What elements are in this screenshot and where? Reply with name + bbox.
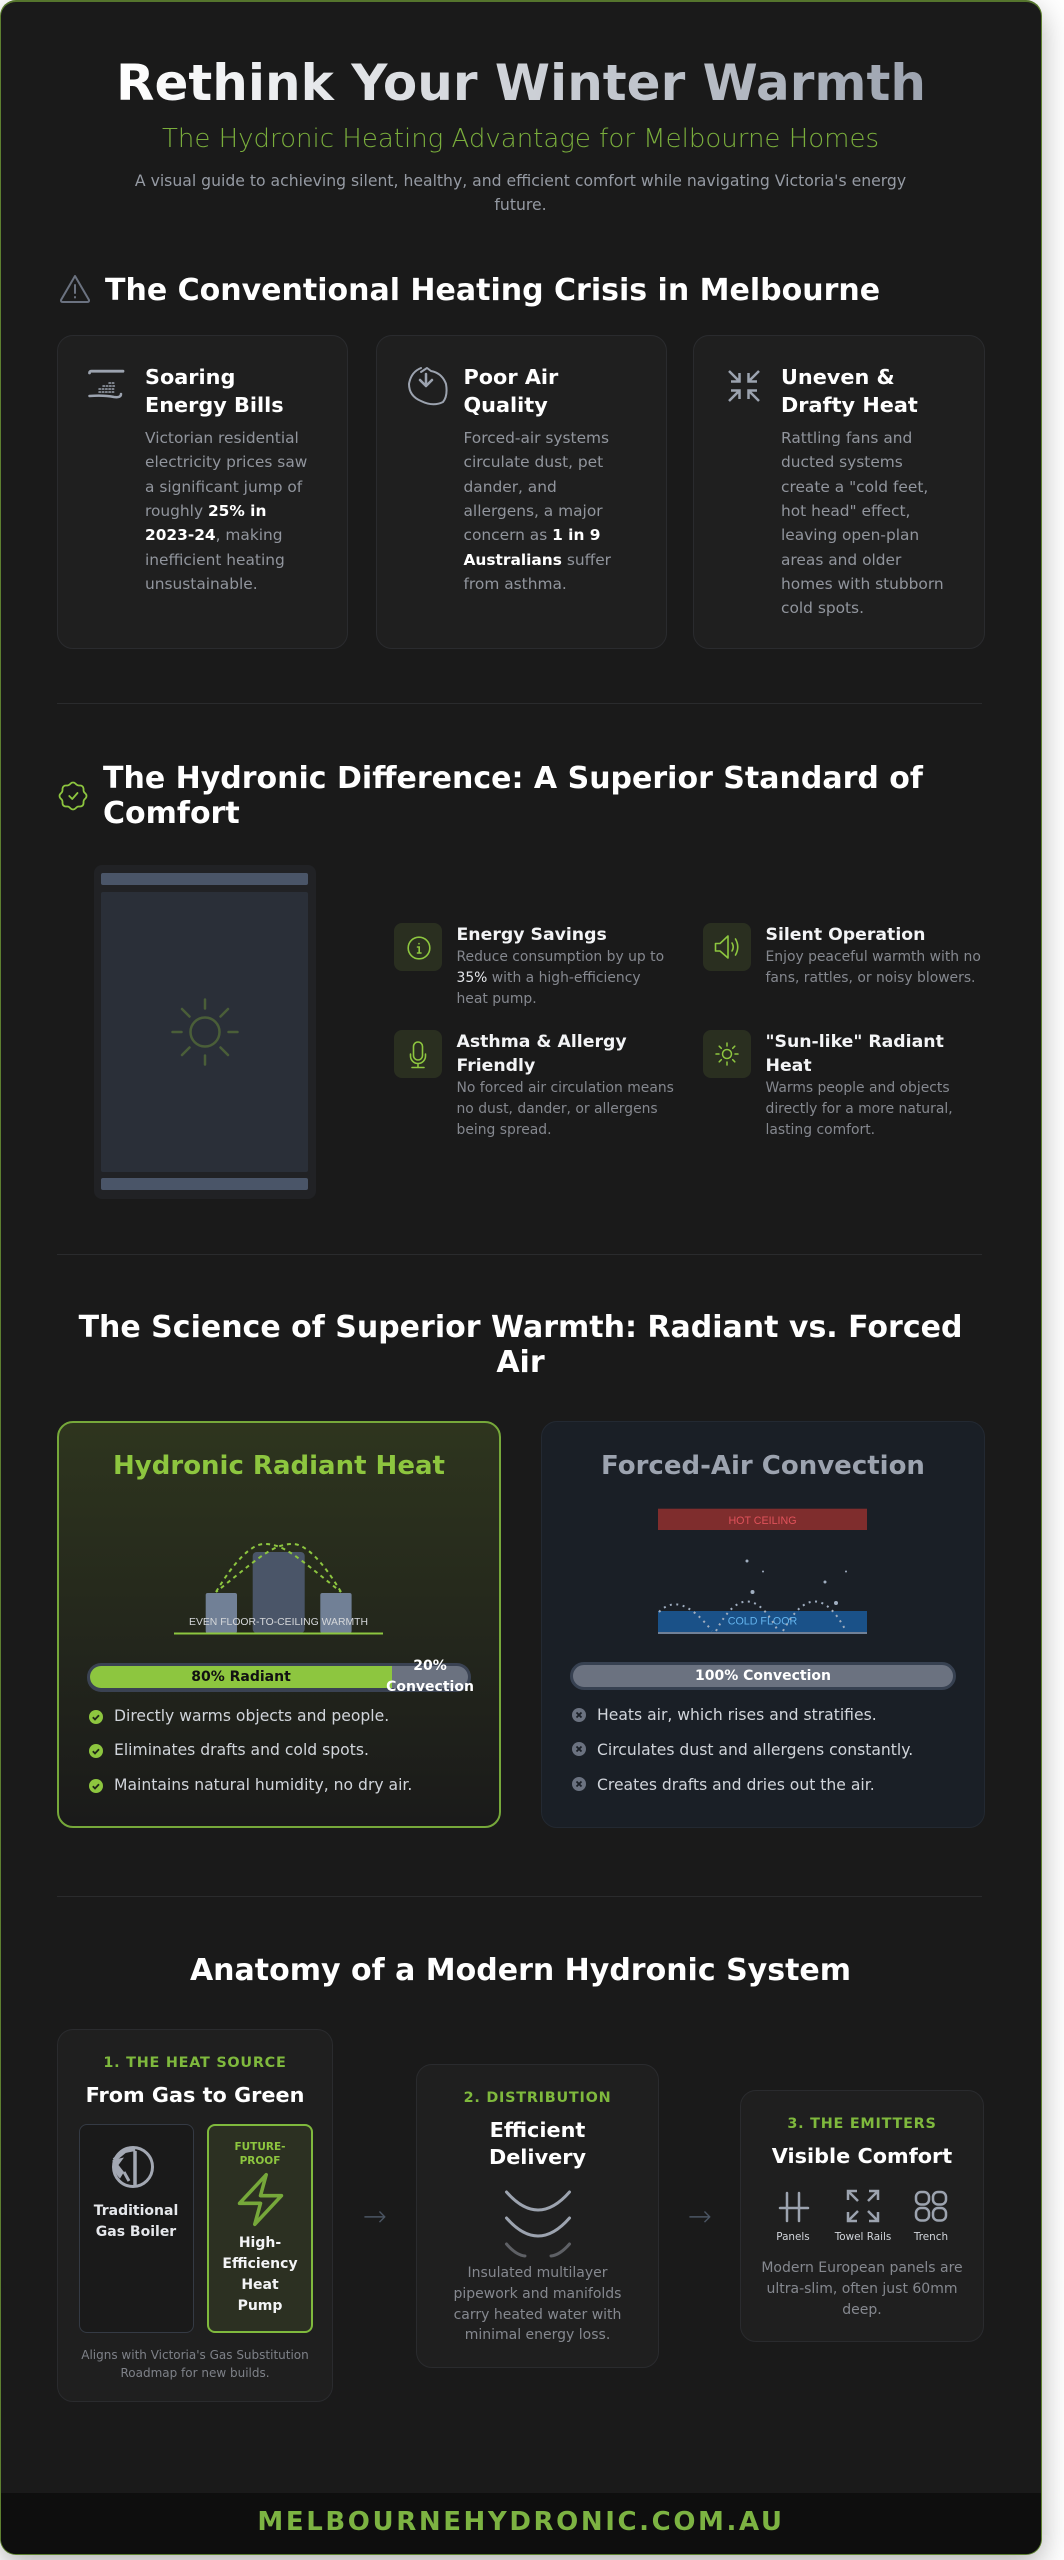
intro text: future. xyxy=(494,195,547,214)
icon: sun xyxy=(171,998,239,1066)
body text: a significant jump of xyxy=(145,478,302,496)
body text xyxy=(781,429,944,617)
step label: 1. THE HEAT SOURCE xyxy=(103,2055,287,2071)
text: no dust, dander, or allergens xyxy=(456,1101,658,1117)
body text xyxy=(741,2258,983,2320)
body text: dander, and xyxy=(464,478,557,496)
panel: hydronic radiant heat xyxy=(57,1421,501,1828)
body text xyxy=(145,429,307,593)
body text: Rattling fans and xyxy=(781,429,912,447)
heading: Efficient xyxy=(490,2118,585,2142)
body text: Modern European panels are xyxy=(761,2260,963,2276)
body text: roughly 25% in xyxy=(145,502,266,520)
text: heat pump. xyxy=(456,991,537,1007)
heading: hydronic difference: Comfort xyxy=(103,796,240,830)
title xyxy=(456,1032,627,1076)
text: No forced air circulation means xyxy=(456,1080,674,1096)
item xyxy=(572,1777,586,1791)
item text: Circulates dust and allergens constantly. xyxy=(597,1741,913,1759)
diagram: stratified air: HOT CEILING xyxy=(728,1515,797,1527)
label radiant: 80% Radiant xyxy=(191,1669,291,1685)
body text: pipework and manifolds xyxy=(454,2286,621,2302)
heading: Delivery xyxy=(489,2145,586,2169)
body text: hot head" effect, xyxy=(781,502,910,520)
panel: distribution xyxy=(416,2064,659,2368)
body text: areas and older xyxy=(781,551,901,569)
bar: 100 convection xyxy=(570,1662,956,1690)
text: 35% with a high-efficiency xyxy=(456,970,641,986)
feature: sun-like radiant heat xyxy=(703,1030,953,1138)
label: Traditional xyxy=(94,2203,178,2219)
icon: speaker xyxy=(703,923,751,971)
icon: energy bills xyxy=(88,370,124,398)
label convection: Convection xyxy=(386,1679,474,1695)
body text: allergens, a major xyxy=(464,502,603,520)
title: Friendly xyxy=(456,1056,535,1076)
label xyxy=(94,2203,178,2240)
bar: 80 radiant 20 convection xyxy=(87,1663,471,1692)
body text: concern as 1 in 9 xyxy=(464,526,600,544)
heading xyxy=(145,365,284,417)
label: trench: Trench xyxy=(914,2231,948,2243)
heading: Hydronic Radiant Heat xyxy=(113,1451,445,1481)
icon: towel rails xyxy=(846,2189,880,2223)
text xyxy=(766,1080,953,1138)
label: towel rails: Towel Rails xyxy=(835,2231,891,2243)
label: High- xyxy=(239,2235,281,2251)
item xyxy=(89,1710,103,1724)
title xyxy=(766,1032,944,1076)
panel: uneven and drafty heat xyxy=(693,335,985,649)
text: fans, rattles, or noisy blowers. xyxy=(766,970,975,986)
item text: Maintains natural humidity, no dry air. xyxy=(114,1776,412,1794)
heading: crisis: The Conventional Heating Crisis in Melbourne xyxy=(105,272,880,308)
heading: Uneven & xyxy=(781,365,895,389)
label xyxy=(222,2235,298,2314)
body text: inefficient heating xyxy=(145,551,285,569)
top bar xyxy=(101,873,308,885)
body text: Insulated multilayer xyxy=(468,2265,607,2281)
icon: trench xyxy=(914,2190,948,2224)
subtitle: The Hydronic Heating Advantage for Melbourne Homes xyxy=(162,124,879,154)
icon: warning triangle xyxy=(60,275,90,303)
feature: asthma and allergy friendly xyxy=(394,1030,674,1138)
label: Gas Boiler xyxy=(96,2224,176,2240)
icon: pipes xyxy=(505,2190,571,2258)
label: Heat xyxy=(241,2277,279,2293)
icon: info xyxy=(394,923,442,971)
panel: heat source xyxy=(57,2029,333,2402)
note: Aligns with Victoria's Gas Substitution xyxy=(81,2348,309,2362)
note xyxy=(81,2348,309,2380)
body text: from asthma. xyxy=(464,575,567,593)
body text: Forced-air systems xyxy=(464,429,609,447)
heading: Poor Air xyxy=(464,365,558,389)
tag: PROOF xyxy=(240,2155,280,2167)
title: Rethink Your Winter Warmth xyxy=(116,54,926,112)
title: Asthma & Allergy xyxy=(456,1032,627,1052)
fill radiant xyxy=(90,1666,392,1688)
step label: 3. THE EMITTERS xyxy=(787,2116,937,2132)
item text: Directly warms objects and people. xyxy=(114,1707,389,1725)
body text: Victorian residential xyxy=(145,429,299,447)
text: Warms people and objects xyxy=(766,1080,950,1096)
label: 100% Convection xyxy=(695,1668,831,1684)
text: being spread. xyxy=(456,1122,552,1138)
text xyxy=(766,949,981,986)
icon: panels xyxy=(779,2191,809,2223)
title: "Sun-like" Radiant xyxy=(766,1032,944,1052)
diagram: radiant heat room: EVEN FLOOR-TO-CEILING WARMTH xyxy=(189,1617,368,1628)
body text: circulate dust, pet xyxy=(464,453,603,471)
text: Reduce consumption by up to xyxy=(456,949,664,965)
tag xyxy=(234,2141,286,2167)
heading: Drafty Heat xyxy=(781,393,918,417)
heading xyxy=(781,365,918,417)
label: panels: Panels xyxy=(776,2231,810,2243)
text: directly for a more natural, xyxy=(766,1101,953,1117)
body text: ducted systems xyxy=(781,453,903,471)
option: heat pump xyxy=(207,2124,313,2333)
label: Efficiency xyxy=(222,2256,298,2272)
diagram: stratified air: COLD FLOOR xyxy=(728,1616,798,1628)
icon: gas boiler xyxy=(112,2146,154,2188)
item text: Creates drafts and dries out the air. xyxy=(597,1776,875,1794)
body text: 2023-24, making xyxy=(145,526,283,544)
body text: deep. xyxy=(842,2302,882,2318)
heading: anatomy: Anatomy of a Modern Hydronic System xyxy=(190,1952,851,1988)
footer url: MELBOURNEHYDRONIC.COM.AU xyxy=(257,2507,785,2537)
arrow: → xyxy=(688,2199,712,2233)
icon: sun small xyxy=(703,1030,751,1078)
body text: leaving open-plan xyxy=(781,526,919,544)
body text: cold spots. xyxy=(781,599,864,617)
intro text xyxy=(135,171,906,214)
icon: check badge xyxy=(58,782,88,810)
heading: Forced-Air Convection xyxy=(601,1451,925,1481)
icon: microphone xyxy=(394,1030,442,1078)
text xyxy=(456,949,664,1007)
radiator illustration xyxy=(94,865,316,1199)
item xyxy=(89,1779,103,1793)
feature: energy savings xyxy=(394,923,664,1007)
icon: arrows inward xyxy=(728,370,760,402)
heading: Quality xyxy=(464,393,548,417)
heading xyxy=(464,365,558,417)
text xyxy=(456,1080,674,1138)
icon: air quality xyxy=(408,367,448,406)
fill convection xyxy=(392,1666,468,1688)
panel body xyxy=(101,892,308,1172)
body text: create a "cold feet, xyxy=(781,478,928,496)
label convection: 20% xyxy=(413,1658,447,1674)
heading: From Gas to Green xyxy=(86,2083,304,2107)
heading: Visible Comfort xyxy=(772,2144,952,2168)
item xyxy=(572,1742,586,1756)
step label: 2. DISTRIBUTION xyxy=(464,2090,611,2106)
body text: unsustainable. xyxy=(145,575,258,593)
heading xyxy=(417,2117,658,2171)
title: Energy Savings xyxy=(456,925,607,945)
icon: lightning xyxy=(238,2172,284,2226)
panel: poor air quality xyxy=(376,335,666,649)
text: Enjoy peaceful warmth with no xyxy=(766,949,981,965)
title: Heat xyxy=(766,1056,812,1076)
option: gas boiler xyxy=(79,2124,194,2333)
heading: Soaring xyxy=(145,365,235,389)
intro text: A visual guide to achieving silent, healthy, and efficient comfort while navigating Victoria's energy xyxy=(135,171,906,190)
body text xyxy=(464,429,611,593)
item text: Eliminates drafts and cold spots. xyxy=(114,1741,369,1759)
feature: silent operation xyxy=(703,923,981,986)
arrow: → xyxy=(363,2199,387,2233)
label convection xyxy=(386,1658,474,1695)
note: Roadmap for new builds. xyxy=(120,2366,270,2380)
footer band xyxy=(1,2493,1041,2554)
panel: forced-air convection xyxy=(541,1421,985,1828)
body text: ultra-slim, often just 60mm xyxy=(766,2281,958,2297)
heading: Energy Bills xyxy=(145,393,284,417)
title: Silent Operation xyxy=(766,925,925,945)
body text: homes with stubborn xyxy=(781,575,944,593)
body text xyxy=(417,2263,658,2346)
panel: emitters xyxy=(740,2090,984,2342)
heading: science xyxy=(78,1310,962,1380)
item xyxy=(572,1708,586,1722)
tag: FUTURE- xyxy=(234,2141,286,2153)
heading: hydronic difference: The Hydronic Difference: A Superior Standard of xyxy=(103,760,923,796)
item text: Heats air, which rises and stratifies. xyxy=(597,1706,877,1724)
heading: science: Air xyxy=(496,1345,545,1380)
item xyxy=(89,1744,103,1758)
body text: electricity prices saw xyxy=(145,453,307,471)
body text: carry heated water with xyxy=(454,2307,621,2323)
heading: science: The Science of Superior Warmth: Radiant vs. Forced xyxy=(79,1310,962,1345)
heading: hydronic difference xyxy=(103,760,924,830)
label: Pump xyxy=(238,2298,282,2314)
body text: Australians suffer xyxy=(464,551,611,569)
bottom bar xyxy=(101,1178,308,1190)
panel: soaring energy bills xyxy=(57,335,348,649)
list xyxy=(89,1707,412,1794)
body text: minimal energy loss. xyxy=(465,2327,610,2343)
text: lasting comfort. xyxy=(766,1122,875,1138)
list xyxy=(572,1706,913,1794)
